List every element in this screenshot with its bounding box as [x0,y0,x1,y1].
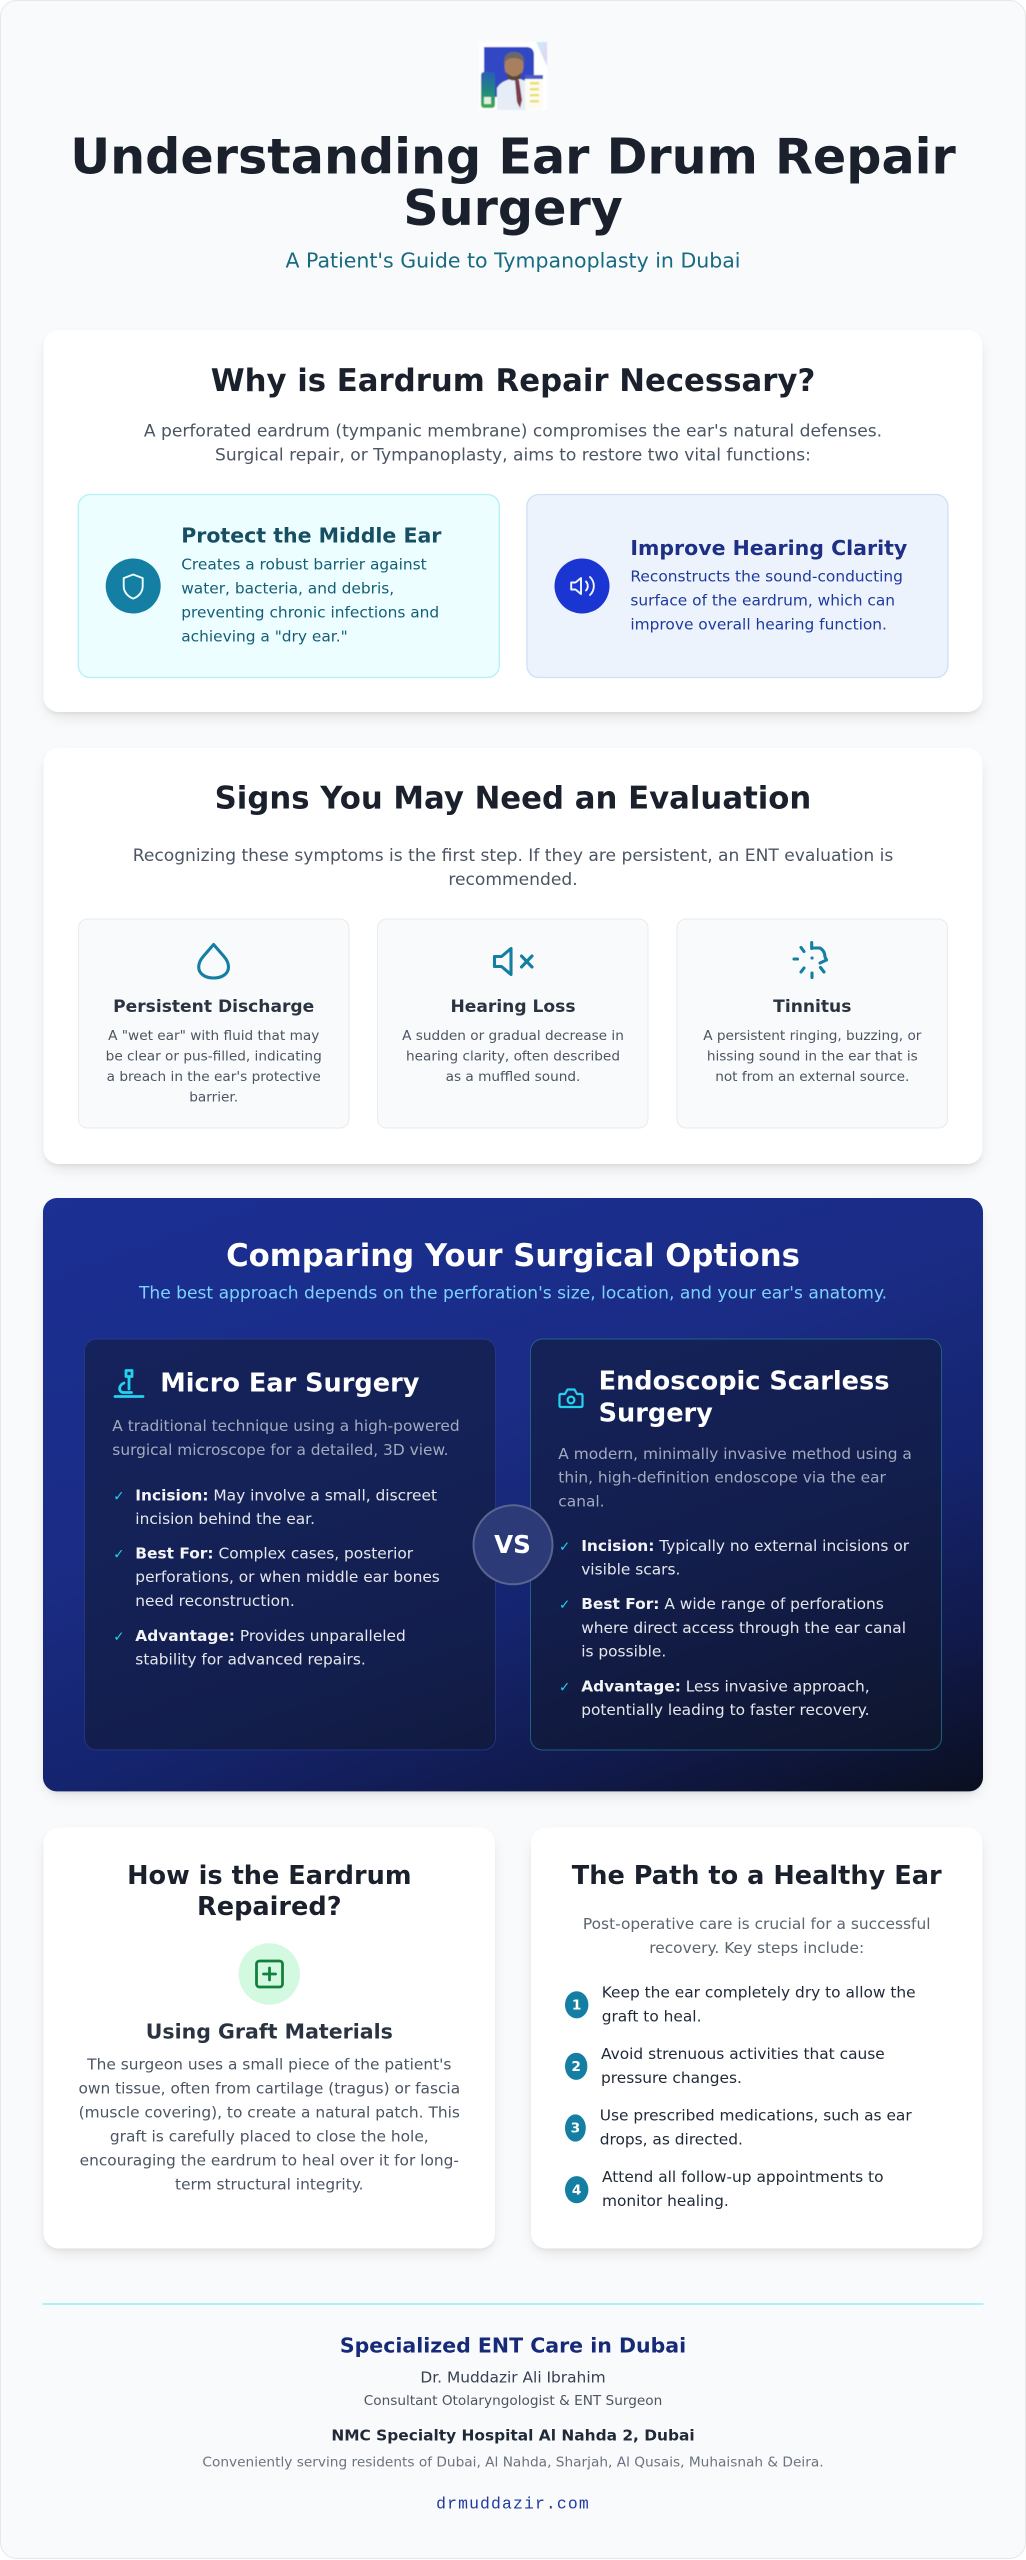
panel: how the eardrum is repaired: Using Graft Materials [146,2020,393,2044]
card: endoscopic scarless surgery: Endoscopic Scarless [599,1367,889,1397]
card: protect the middle ear: Creates a robust barrier against [181,555,427,573]
card: persistent discharge: barrier. [189,1090,238,1106]
card: protect the middle ear: Protect the Middle Ear [181,524,442,548]
header [70,42,957,273]
footer heading: Specialized ENT Care in Dubai [340,2334,686,2358]
card: protect the middle ear: preventing chronic infections and [181,603,439,621]
heading: Comparing Your Surgical Options [226,1238,800,1274]
list: micro surgery points: Incision: May involve a small, discreet [135,1486,437,1504]
step 1 [565,1983,916,2025]
card: persistent discharge: A "wet ear" with fluid that may [108,1028,319,1044]
list: micro surgery points: stability for advanced repairs. [135,1650,366,1668]
footer [42,2303,984,2513]
body text [78,2055,460,2193]
step 2: 2 [571,2059,581,2075]
heading: Repaired? [197,1892,342,1922]
card: micro ear surgery: surgical microscope for a detailed, 3D view. [112,1441,449,1459]
card: tinnitus: Tinnitus [773,997,851,1017]
heading: Why is Eardrum Repair Necessary? [211,363,815,399]
card: protect the middle ear: water, bacteria, and debris, [181,579,394,597]
body text: encouraging the eardrum to heal over it for long- [80,2151,459,2169]
card: endoscopic scarless surgery: canal. [558,1492,605,1510]
card: hearing loss: as a muffled sound. [446,1069,580,1085]
card: tinnitus: not from an external source. [715,1069,909,1085]
list: micro surgery points: Advantage: Provides unparalleled [135,1627,406,1645]
list: micro surgery points: ✓ [113,1488,125,1504]
card: persistent discharge: a breach in the ear's protective [107,1069,321,1085]
panel: signs of evaluation [44,748,982,1168]
step 3 [565,2107,912,2149]
website: drmuddazir.com [436,2494,590,2513]
heading: The Path to a Healthy Ear [572,1861,942,1891]
list: micro surgery points: ✓ [113,1546,125,1562]
body text: own tissue, often from cartilage (tragus) or fascia [78,2079,460,2097]
badge: VS [474,1505,552,1584]
doctor photo logo [479,42,547,110]
step 3: 3 [571,2121,580,2137]
panel: comparing surgical options [43,1198,983,1795]
list: endoscopic points [559,1537,910,1719]
card: improve hearing clarity: improve overall hearing function. [630,616,887,634]
list: micro surgery points: perforations, or when middle ear bones [135,1568,440,1586]
card: persistent discharge [78,919,349,1128]
intro text: Post-operative care is crucial for a successful [583,1915,930,1933]
card: protect the middle ear [78,494,499,678]
card: improve hearing clarity: Reconstructs the sound-conducting [630,568,903,586]
hospital: NMC Specialty Hospital Al Nahda 2, Dubai [331,2427,695,2445]
list: micro surgery points: ✓ [113,1629,125,1645]
card: micro ear surgery: Micro Ear Surgery [160,1369,420,1399]
panel: how the eardrum is repaired [44,1828,495,2252]
step 4 [565,2168,884,2210]
step 2: pressure changes. [601,2069,742,2087]
list: endoscopic points: visible scars. [581,1561,680,1579]
card: endoscopic scarless surgery: thin, high-definition endoscope via the ear [558,1469,887,1487]
intro text: A perforated eardrum (tympanic membrane) compromises the ear's natural defenses. [144,422,882,442]
card: micro ear surgery [84,1339,496,1750]
card: hearing loss: Hearing Loss [450,997,576,1017]
list: endoscopic points: potentially leading to faster recovery. [581,1701,870,1719]
card: endoscopic scarless surgery [530,1339,942,1750]
icon: shield [106,558,161,614]
card: tinnitus: A persistent ringing, buzzing, or [703,1028,922,1044]
card: tinnitus: hissing sound in the ear that is [707,1048,918,1064]
card: endoscopic scarless surgery: Surgery [599,1398,713,1428]
header: Surgery [403,179,623,237]
step 4: 4 [572,2182,581,2198]
intro text: Recognizing these symptoms is the first step. If they are persistent, an ENT evaluation is [133,846,893,866]
list: micro surgery points: Best For: Complex cases, posterior [135,1544,414,1562]
icon: camera [560,1390,582,1407]
intro text: recommended. [448,870,578,890]
list: micro surgery points [113,1486,440,1668]
intro text [583,1915,930,1957]
panel: path to a healthy ear [531,1828,982,2252]
list: micro surgery points: incision behind the ear. [135,1510,315,1528]
badge: VS: VS [494,1530,531,1559]
card: improve hearing clarity: Improve Hearing Clarity [630,536,907,560]
step 3: drops, as directed. [600,2131,743,2149]
list: endoscopic points: ✓ [559,1539,570,1555]
step 4: Attend all follow-up appointments to [602,2168,884,2186]
card: protect the middle ear: achieving a "dry ear." [181,627,348,645]
step 1: Keep the ear completely dry to allow the [602,1983,916,2001]
card: hearing loss [378,919,648,1128]
icon: graft plus square [239,1943,300,2005]
panel: why repair is necessary [44,330,982,716]
card: micro ear surgery: A traditional technique using a high-powered [112,1417,460,1435]
list: endoscopic points: is possible. [581,1643,666,1661]
card: tinnitus [677,919,948,1128]
subtitle: A Patient's Guide to Tympanoplasty in Dubai [286,249,740,273]
body text: The surgeon uses a small piece of the patient's [86,2055,451,2073]
intro text: recovery. Key steps include: [649,1939,864,1957]
card: improve hearing clarity: surface of the eardrum, which can [630,592,895,610]
icon: ringing burst [794,942,826,978]
body text: (muscle covering), to create a natural patch. This [79,2103,460,2121]
doctor role: Consultant Otolaryngologist & ENT Surgeon [364,2393,662,2409]
list: endoscopic points: ✓ [559,1597,570,1613]
intro text [133,846,893,890]
heading: How is the Eardrum [127,1861,412,1891]
card: hearing loss: A sudden or gradual decrease in [402,1028,624,1044]
list: endoscopic points: Best For: A wide range of perforations [581,1595,884,1613]
icon: droplet [199,944,228,978]
step 1: 1 [572,1998,581,2014]
title: Understanding Ear Drum Repair [70,127,957,185]
step 1: graft to heal. [602,2007,701,2025]
service area: Conveniently serving residents of Dubai, Al Nahda, Sharjah, Al Qusais, Muhaisnah & Deira. [202,2455,824,2471]
list: endoscopic points: Incision: Typically no external incisions or [581,1537,910,1555]
icon: speaker [554,558,610,614]
heading [127,1861,412,1922]
list: endoscopic points: Advantage: Less invasive approach, [581,1677,870,1695]
step 4: monitor healing. [602,2192,729,2210]
intro text: Surgical repair, or Tympanoplasty, aims to restore two vital functions: [215,446,811,466]
body text: term structural integrity. [175,2175,364,2193]
list: endoscopic points: where direct access through the ear canal [581,1619,906,1637]
list: endoscopic points: ✓ [559,1679,570,1695]
step 2: Avoid strenuous activities that cause [601,2045,885,2063]
icon: microscope [115,1370,143,1396]
card: persistent discharge: Persistent Discharge [113,997,314,1017]
doctor name: Dr. Muddazir Ali Ibrahim [420,2369,606,2387]
card: persistent discharge: be clear or pus-filled, indicating [106,1048,322,1064]
icon: muted speaker [494,948,532,974]
sub heading: The best approach depends on the perforation's size, location, and your ear's anatomy. [138,1284,887,1304]
list: micro surgery points: need reconstruction. [135,1592,295,1610]
heading: Signs You May Need an Evaluation [215,780,811,816]
step 3: Use prescribed medications, such as ear [600,2107,912,2125]
body text: graft is carefully placed to close the hole, [110,2127,429,2145]
intro text [144,422,882,466]
card: improve hearing clarity [527,494,948,678]
card: hearing loss: hearing clarity, often described [406,1048,620,1064]
step 2 [565,2045,885,2087]
card: endoscopic scarless surgery: A modern, minimally invasive method using a [558,1445,912,1463]
